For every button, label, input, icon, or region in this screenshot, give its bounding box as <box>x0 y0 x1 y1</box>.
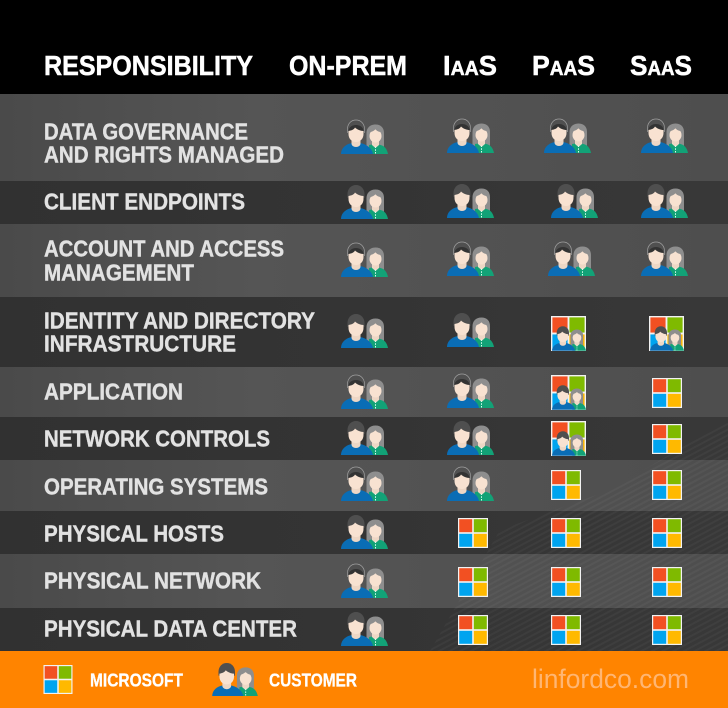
legend label: microsoft: MICROSOFT <box>90 670 183 690</box>
label: network controls: NETWORK CONTROLS <box>44 426 270 452</box>
label: physical data center: PHYSICAL DATA CENTER <box>44 616 297 642</box>
icon: microsoft legend <box>44 665 72 694</box>
label: data governance: DATA GOVERNANCE <box>44 118 248 144</box>
row labels <box>44 118 315 642</box>
label: account and access: ACCOUNT AND ACCESS <box>44 236 284 262</box>
website credit: linfordco.com <box>532 664 689 694</box>
footer legend bar <box>0 651 728 708</box>
heading: iaas: IaaS <box>443 50 497 81</box>
label: account and access: MANAGEMENT <box>44 260 194 286</box>
icons: operating systems row <box>341 467 682 501</box>
label: client endpoints: CLIENT ENDPOINTS <box>44 188 245 214</box>
label: identity and directory: INFRASTRUCTURE <box>44 330 236 356</box>
icons: account and access row <box>341 242 688 277</box>
label: physical network: PHYSICAL NETWORK <box>44 568 261 594</box>
icons: data governance row <box>341 119 688 154</box>
icons: application row <box>341 374 682 410</box>
label: operating systems: OPERATING SYSTEMS <box>44 474 268 500</box>
label: identity and directory <box>44 308 315 356</box>
icons: network controls row <box>341 421 682 456</box>
label: application: APPLICATION <box>44 378 183 404</box>
icons: physical data center row <box>341 612 682 646</box>
label: identity and directory: IDENTITY AND DIRECTORY <box>44 308 315 334</box>
legend label: customer: CUSTOMER <box>269 670 357 690</box>
icon: customer legend <box>212 663 258 696</box>
header bar <box>0 0 728 94</box>
heading: responsibility: RESPONSIBILITY <box>44 50 253 81</box>
label: account and access <box>44 236 284 286</box>
heading: saas: SaaS <box>630 50 692 81</box>
icons: physical network row <box>341 564 682 598</box>
icons: physical hosts row <box>341 515 682 549</box>
row backgrounds <box>0 94 728 651</box>
label: data governance <box>44 118 284 168</box>
icons: identity and directory row <box>341 313 684 351</box>
heading: on-prem: ON-PREM <box>289 50 407 81</box>
label: physical hosts: PHYSICAL HOSTS <box>44 520 224 546</box>
heading: paas: PaaS <box>532 50 595 81</box>
label: data governance: AND RIGHTS MANAGED <box>44 142 284 168</box>
icons: client endpoints row <box>341 184 688 219</box>
